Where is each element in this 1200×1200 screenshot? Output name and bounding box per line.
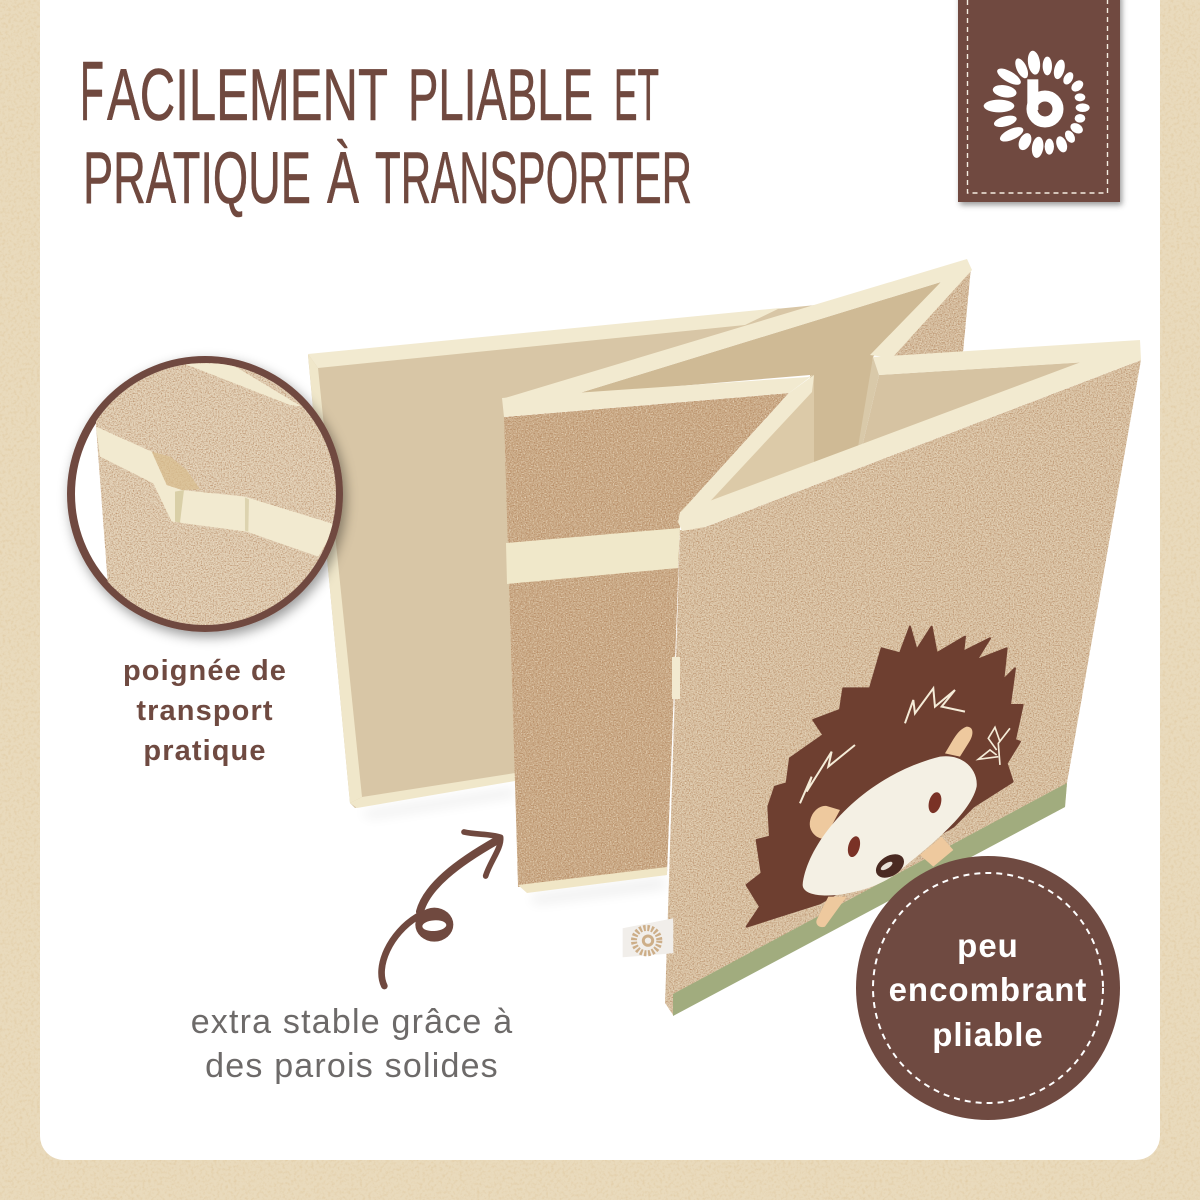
handle caption: transport — [136, 695, 274, 727]
badge — [856, 856, 1120, 1120]
right flap — [858, 340, 1140, 447]
green strip — [673, 783, 1067, 1016]
circle inset: handle — [71, 350, 345, 640]
handle caption — [123, 655, 287, 767]
title: F — [80, 44, 104, 138]
stability caption — [191, 1003, 513, 1085]
hedgehog — [747, 627, 1023, 927]
back panel — [308, 305, 816, 808]
icon: sunflower logo — [984, 50, 1090, 159]
arrow — [382, 832, 501, 986]
logo tag — [958, 0, 1120, 202]
label tag — [623, 918, 673, 957]
product: folded storage box — [71, 259, 1141, 1120]
handle caption: pratique — [143, 735, 267, 767]
title: ET — [614, 55, 659, 136]
front panel — [623, 340, 1141, 1016]
rear folded panel — [505, 259, 972, 467]
title: PRATIQUE — [83, 138, 311, 219]
title: ACILEMENT — [107, 55, 388, 136]
badge: encombrant — [889, 971, 1087, 1008]
fold flap — [680, 375, 814, 512]
title: PLIABLE — [408, 55, 593, 136]
strap — [506, 528, 680, 584]
stability caption: des parois solides — [205, 1047, 499, 1085]
stability caption: extra stable grâce à — [191, 1003, 513, 1041]
title: À — [327, 138, 359, 219]
handle caption: poignée de — [123, 655, 287, 687]
badge: peu — [957, 927, 1019, 964]
floor shadow — [360, 788, 515, 818]
title — [80, 44, 692, 219]
badge: pliable — [932, 1016, 1044, 1053]
middle panel — [502, 375, 814, 893]
title: TRANSPORTER — [375, 138, 692, 219]
